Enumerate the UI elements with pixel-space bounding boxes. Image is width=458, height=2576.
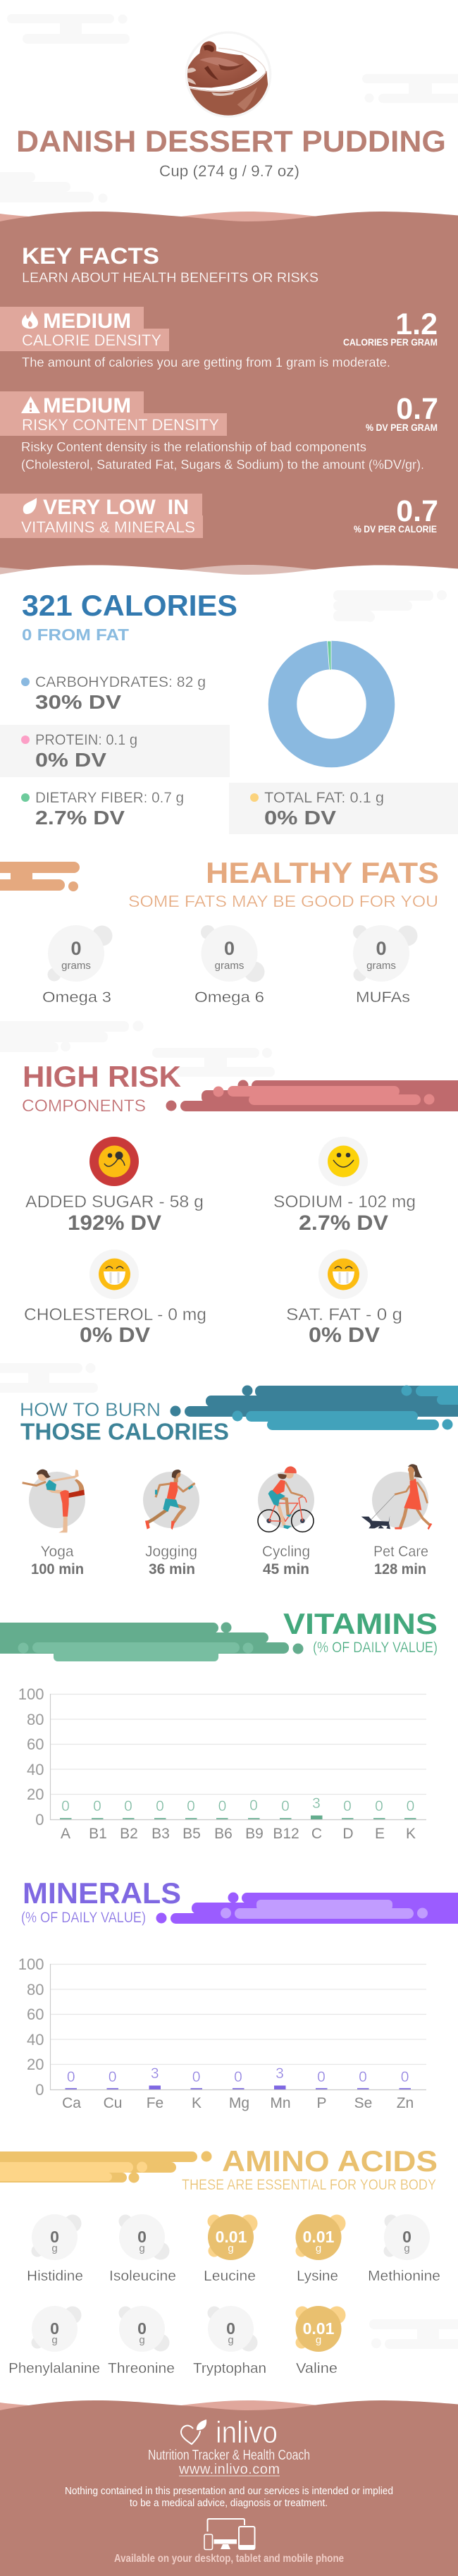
- amino acid: phenylalanine: 0: [50, 2319, 59, 2338]
- amino acid: threonine: 0: [137, 2319, 147, 2338]
- bar chart: vitamins: C: [311, 1826, 322, 1842]
- activity labels: Pet Care: [373, 1544, 428, 1560]
- amino acid: methionine: Methionine: [368, 2269, 440, 2284]
- amino acid: threonine: g: [139, 2334, 145, 2346]
- activity labels: 128 min: [374, 1561, 426, 1577]
- subheading: LEARN ABOUT HEALTH BENEFITS OR RISKS: [22, 271, 318, 286]
- bar chart: vitamins: 100: [18, 1685, 44, 1703]
- risk item: cholesterol: CHOLESTEROL - 0 mg: [24, 1305, 206, 1324]
- risk item: added sugar: [25, 1137, 204, 1235]
- calorie density description: The amount of calories you are getting from 1 gram is moderate.: [22, 355, 390, 370]
- amino acid: methionine: g: [404, 2242, 410, 2254]
- bar chart: vitamins: 20: [27, 1786, 44, 1803]
- subheading: (% OF DAILY VALUE): [21, 1910, 146, 1926]
- amino acid: isoleucine: 0: [137, 2228, 147, 2246]
- bar chart: vitamins: 0: [61, 1798, 70, 1814]
- bar chart: minerals: Mg: [229, 2095, 249, 2111]
- bar chart: minerals: 20: [27, 2056, 44, 2073]
- bar chart: vitamins: 3: [312, 1795, 321, 1812]
- bar chart: vitamins: B12: [273, 1826, 299, 1842]
- activity labels: 36 min: [149, 1561, 195, 1577]
- activity: pet care: [361, 1464, 432, 1530]
- fat item: mufas: 0: [376, 938, 387, 959]
- bar chart: vitamins: [18, 1685, 426, 1842]
- bar chart: vitamins: B9: [245, 1826, 264, 1842]
- bar chart: vitamins: 0: [187, 1798, 195, 1814]
- logo: inlivo: [181, 2415, 278, 2450]
- risk item: added sugar: 192% DV: [68, 1211, 161, 1235]
- activity: cycling: [258, 1466, 314, 1532]
- bar chart: vitamins: 0: [407, 1798, 414, 1814]
- bar chart: minerals: Fe: [147, 2095, 163, 2111]
- amino acid: phenylalanine: g: [51, 2334, 58, 2346]
- amino acid: phenylalanine: [8, 2306, 100, 2376]
- risky content value: % DV PER GRAM: [366, 422, 438, 433]
- legend: carbohydrates: CARBOHYDRATES: 82 g: [35, 674, 206, 690]
- legend: dietary fiber: 2.7% DV: [35, 807, 125, 829]
- subheading: SOME FATS MAY BE GOOD FOR YOU: [128, 892, 438, 910]
- bar chart: minerals: 0: [317, 2069, 326, 2085]
- heading: calories: 321 CALORIES: [22, 589, 237, 622]
- activity labels: 45 min: [263, 1561, 309, 1577]
- section banner: amino acids: [0, 2151, 211, 2183]
- fat item: omega 3: grams: [61, 960, 91, 972]
- fat item: omega 6: [194, 925, 265, 1006]
- risk item: sodium: [273, 1137, 416, 1235]
- tagline: Nutrition Tracker & Health Coach: [148, 2448, 310, 2463]
- amino acid: histidine: g: [51, 2242, 58, 2254]
- legend: protein: [0, 725, 230, 777]
- serving size: Cup (274 g / 9.7 oz): [159, 162, 299, 180]
- bar chart: minerals: 80: [27, 1981, 44, 1998]
- bar chart: minerals: 0: [67, 2069, 75, 2085]
- heading: high risk: [22, 1060, 181, 1116]
- amino acid: histidine: [27, 2214, 83, 2284]
- amino acid: histidine: 0: [50, 2228, 59, 2246]
- amino acid: methionine: 0: [402, 2228, 411, 2246]
- bar chart: minerals: 100: [18, 1955, 44, 1973]
- availability note: Available on your desktop, tablet and mobile phone: [114, 2553, 344, 2565]
- risk item: saturated fat: 0% DV: [309, 1324, 380, 1347]
- bar chart: minerals: 0: [234, 2069, 242, 2085]
- risky content density badge: [0, 391, 227, 436]
- bar chart: vitamins: D: [342, 1826, 354, 1842]
- calorie density value: CALORIES PER GRAM: [343, 336, 438, 348]
- heading: vitamins: [283, 1607, 438, 1656]
- section banner: healthy fats: [0, 862, 80, 891]
- bar chart: minerals: Cu: [104, 2095, 122, 2111]
- bar chart: vitamins: 40: [27, 1761, 44, 1778]
- activity labels: [31, 1544, 428, 1577]
- calorie density badge: CALORIE DENSITY: [22, 331, 161, 349]
- heading: minerals: [21, 1876, 181, 1926]
- bar chart: vitamins: B1: [89, 1826, 107, 1842]
- bar chart: vitamins: 0: [343, 1798, 352, 1814]
- heading: minerals: MINERALS: [23, 1876, 181, 1910]
- fat item: omega 3: [42, 925, 113, 1006]
- section banner: burn calories: [171, 1385, 458, 1430]
- amino acid: valine: 0.01: [303, 2319, 335, 2338]
- amino acid: lysine: g: [316, 2242, 321, 2254]
- activity: yoga: [23, 1470, 85, 1532]
- legend: total fat: 0% DV: [264, 807, 336, 829]
- risky content description: Risky Content density is the relationship of bad components: [21, 440, 366, 454]
- bar chart: minerals: K: [192, 2095, 202, 2111]
- risky content value: 0.7: [396, 392, 438, 426]
- risky content value: [366, 392, 438, 433]
- vitamins and minerals value: 0.7: [396, 494, 438, 528]
- bar chart: minerals: [18, 1955, 426, 2111]
- amino acid: leucine: Leucine: [204, 2269, 256, 2284]
- amino acid: threonine: [108, 2306, 175, 2376]
- heading: how to burn those calories: [20, 1399, 229, 1444]
- bar chart: minerals: P: [316, 2095, 327, 2111]
- heading: high risk: HIGH RISK: [23, 1060, 181, 1093]
- bar chart: vitamins: B5: [182, 1826, 201, 1842]
- icon: leaf: [23, 498, 37, 514]
- bar chart: minerals: 0: [192, 2069, 200, 2085]
- heading: how to burn those calories: HOW TO BURN: [20, 1399, 161, 1420]
- bar chart: vitamins: 0: [93, 1798, 101, 1814]
- amino acid: tryptophan: [193, 2306, 266, 2376]
- amino acid: phenylalanine: Phenylalanine: [8, 2361, 100, 2376]
- bar chart: vitamins: 0: [375, 1798, 383, 1814]
- heading: healthy fats: HEALTHY FATS: [206, 856, 439, 889]
- amino acid: leucine: [204, 2214, 258, 2284]
- amino acid: lysine: Lysine: [297, 2269, 338, 2284]
- calorie density badge: MEDIUM: [43, 310, 131, 333]
- icon: devices: [204, 2519, 255, 2550]
- risk item: saturated fat: [286, 1250, 402, 1347]
- bar chart: vitamins: B6: [214, 1826, 233, 1842]
- fat item: mufas: MUFAs: [356, 989, 410, 1006]
- activity labels: Jogging: [145, 1544, 197, 1560]
- fat item: omega 6: Omega 6: [194, 989, 264, 1006]
- legend: protein: PROTEIN: 0.1 g: [35, 732, 137, 748]
- website link: www.inlivo.com: [178, 2462, 280, 2477]
- disclaimer: [65, 2485, 393, 2509]
- risk item: sodium: SODIUM - 102 mg: [273, 1192, 416, 1211]
- subheading: from fat: 0 FROM FAT: [22, 625, 129, 644]
- activity labels: Cycling: [262, 1544, 310, 1560]
- section banner: high risk: [166, 1080, 458, 1111]
- amino acid: lysine: [296, 2214, 345, 2284]
- activity labels: Yoga: [40, 1544, 74, 1560]
- bar chart: vitamins: 0: [249, 1797, 258, 1814]
- risk item: sodium: 2.7% DV: [299, 1211, 388, 1235]
- bar chart: minerals: 3: [276, 2065, 284, 2082]
- food photo: pudding in a glass bowl: [185, 31, 271, 118]
- heading: key facts: KEY FACTS: [22, 243, 159, 269]
- title: DANISH DESSERT PUDDING: [16, 125, 446, 159]
- activity: jogging: [143, 1470, 199, 1530]
- heading: healthy fats: [128, 856, 439, 910]
- risk item: cholesterol: [24, 1250, 206, 1347]
- risk item: added sugar: ADDED SUGAR - 58 g: [25, 1192, 204, 1211]
- bar chart: minerals: Zn: [397, 2095, 414, 2111]
- fat item: mufas: [353, 925, 417, 1006]
- panel: key facts: [0, 212, 458, 585]
- amino acid: tryptophan: Tryptophan: [193, 2361, 266, 2376]
- subheading: (% OF DAILY VALUE): [313, 1640, 438, 1656]
- bar chart: minerals: 40: [27, 2031, 44, 2049]
- disclaimer: to be a medical advice, diagnosis or treatment.: [130, 2497, 328, 2509]
- bar chart: vitamins: 60: [27, 1735, 44, 1753]
- risky content description: [21, 440, 424, 472]
- logo: inlivo: inlivo: [216, 2415, 278, 2450]
- vitamins and minerals value: [354, 494, 438, 535]
- bar chart: minerals: 0: [109, 2069, 116, 2085]
- bar chart: minerals: 0: [401, 2069, 409, 2085]
- fat item: omega 3: Omega 3: [42, 989, 111, 1006]
- legend: total fat: [229, 783, 458, 834]
- amino acid: leucine: g: [228, 2242, 234, 2254]
- legend: protein: 0% DV: [35, 749, 106, 771]
- bar chart: vitamins: E: [375, 1826, 385, 1842]
- heading: vitamins: VITAMINS: [283, 1607, 438, 1640]
- disclaimer: Nothing contained in this presentation and our services is intended or implied: [65, 2485, 393, 2497]
- vitamins and minerals value: % DV PER CALORIE: [354, 523, 437, 535]
- amino acid: threonine: Threonine: [108, 2361, 175, 2376]
- fat item: mufas: grams: [366, 960, 396, 972]
- amino acid: isoleucine: g: [139, 2242, 145, 2254]
- calorie density badge: [0, 307, 169, 351]
- risk item: cholesterol: 0% DV: [80, 1324, 150, 1347]
- bar chart: minerals: 0: [35, 2081, 44, 2099]
- legend: dietary fiber: DIETARY FIBER: 0.7 g: [35, 790, 184, 806]
- calorie density value: [343, 307, 438, 348]
- risky content description: (Cholesterol, Saturated Fat, Sugars & Sodium) to the amount (%DV/gr).: [21, 458, 424, 472]
- subheading: components: COMPONENTS: [22, 1097, 146, 1116]
- bar chart: minerals: 0: [359, 2069, 367, 2085]
- risky content density badge: RISKY CONTENT DENSITY: [22, 416, 219, 434]
- calorie density value: 1.2: [395, 307, 438, 341]
- risky content density badge: MEDIUM: [43, 394, 131, 417]
- amino acid: leucine: 0.01: [216, 2228, 247, 2246]
- icon: warning triangle: [21, 396, 40, 413]
- bar chart: minerals: Ca: [62, 2095, 81, 2111]
- vitamins and minerals badge: VERY LOW IN: [43, 496, 189, 519]
- panel: footer: [0, 2400, 458, 2576]
- vitamins and minerals badge: [0, 494, 203, 538]
- risk item: saturated fat: SAT. FAT - 0 g: [286, 1305, 402, 1324]
- amino acid: isoleucine: [109, 2214, 176, 2284]
- bar chart: vitamins: 0: [124, 1798, 132, 1814]
- legend: carbohydrates: [21, 674, 206, 713]
- legend: dietary fiber: [21, 790, 184, 829]
- bar chart: minerals: Se: [354, 2095, 372, 2111]
- bar chart: vitamins: 0: [35, 1811, 44, 1829]
- activity labels: 100 min: [31, 1561, 84, 1577]
- bar chart: vitamins: 80: [27, 1711, 44, 1728]
- amino acid: valine: Valine: [296, 2361, 338, 2376]
- bar chart: vitamins: B2: [120, 1826, 138, 1842]
- vitamins and minerals badge: VITAMINS & MINERALS: [21, 518, 195, 536]
- bar chart: minerals: 60: [27, 2006, 44, 2023]
- section banner: minerals: [156, 1893, 458, 1924]
- amino acid: tryptophan: g: [228, 2334, 234, 2346]
- bar chart: vitamins: A: [61, 1826, 70, 1842]
- amino acid: valine: [296, 2306, 345, 2376]
- amino acid: tryptophan: 0: [226, 2319, 235, 2338]
- bar chart: vitamins: B3: [151, 1826, 170, 1842]
- bar chart: vitamins: 0: [156, 1798, 164, 1814]
- legend: carbohydrates: 30% DV: [35, 691, 121, 713]
- amino acid: isoleucine: Isoleucine: [109, 2269, 176, 2284]
- legend: total fat: TOTAL FAT: 0.1 g: [264, 790, 384, 806]
- amino acid: histidine: Histidine: [27, 2269, 83, 2284]
- heading: amino acids: AMINO ACIDS: [222, 2144, 438, 2178]
- bar chart: minerals: 3: [151, 2065, 159, 2082]
- icon: flame: [22, 310, 38, 329]
- fat item: omega 6: grams: [215, 960, 244, 972]
- section banner: vitamins: [0, 1622, 303, 1661]
- heading: how to burn those calories: THOSE CALORIES: [20, 1419, 229, 1444]
- fat item: omega 6: 0: [224, 938, 235, 959]
- heading: calories: [22, 589, 237, 644]
- bar chart: vitamins: 0: [281, 1798, 290, 1814]
- amino acid: lysine: 0.01: [303, 2228, 335, 2246]
- amino acid: methionine: [368, 2214, 440, 2284]
- bar chart: minerals: Mn: [270, 2095, 291, 2111]
- amino acid: valine: g: [316, 2334, 321, 2346]
- fat item: omega 3: 0: [70, 938, 82, 959]
- heading: amino acids: [182, 2144, 438, 2193]
- bar chart: vitamins: 0: [218, 1798, 226, 1814]
- donut chart: [283, 641, 380, 753]
- bar chart: vitamins: K: [406, 1826, 416, 1842]
